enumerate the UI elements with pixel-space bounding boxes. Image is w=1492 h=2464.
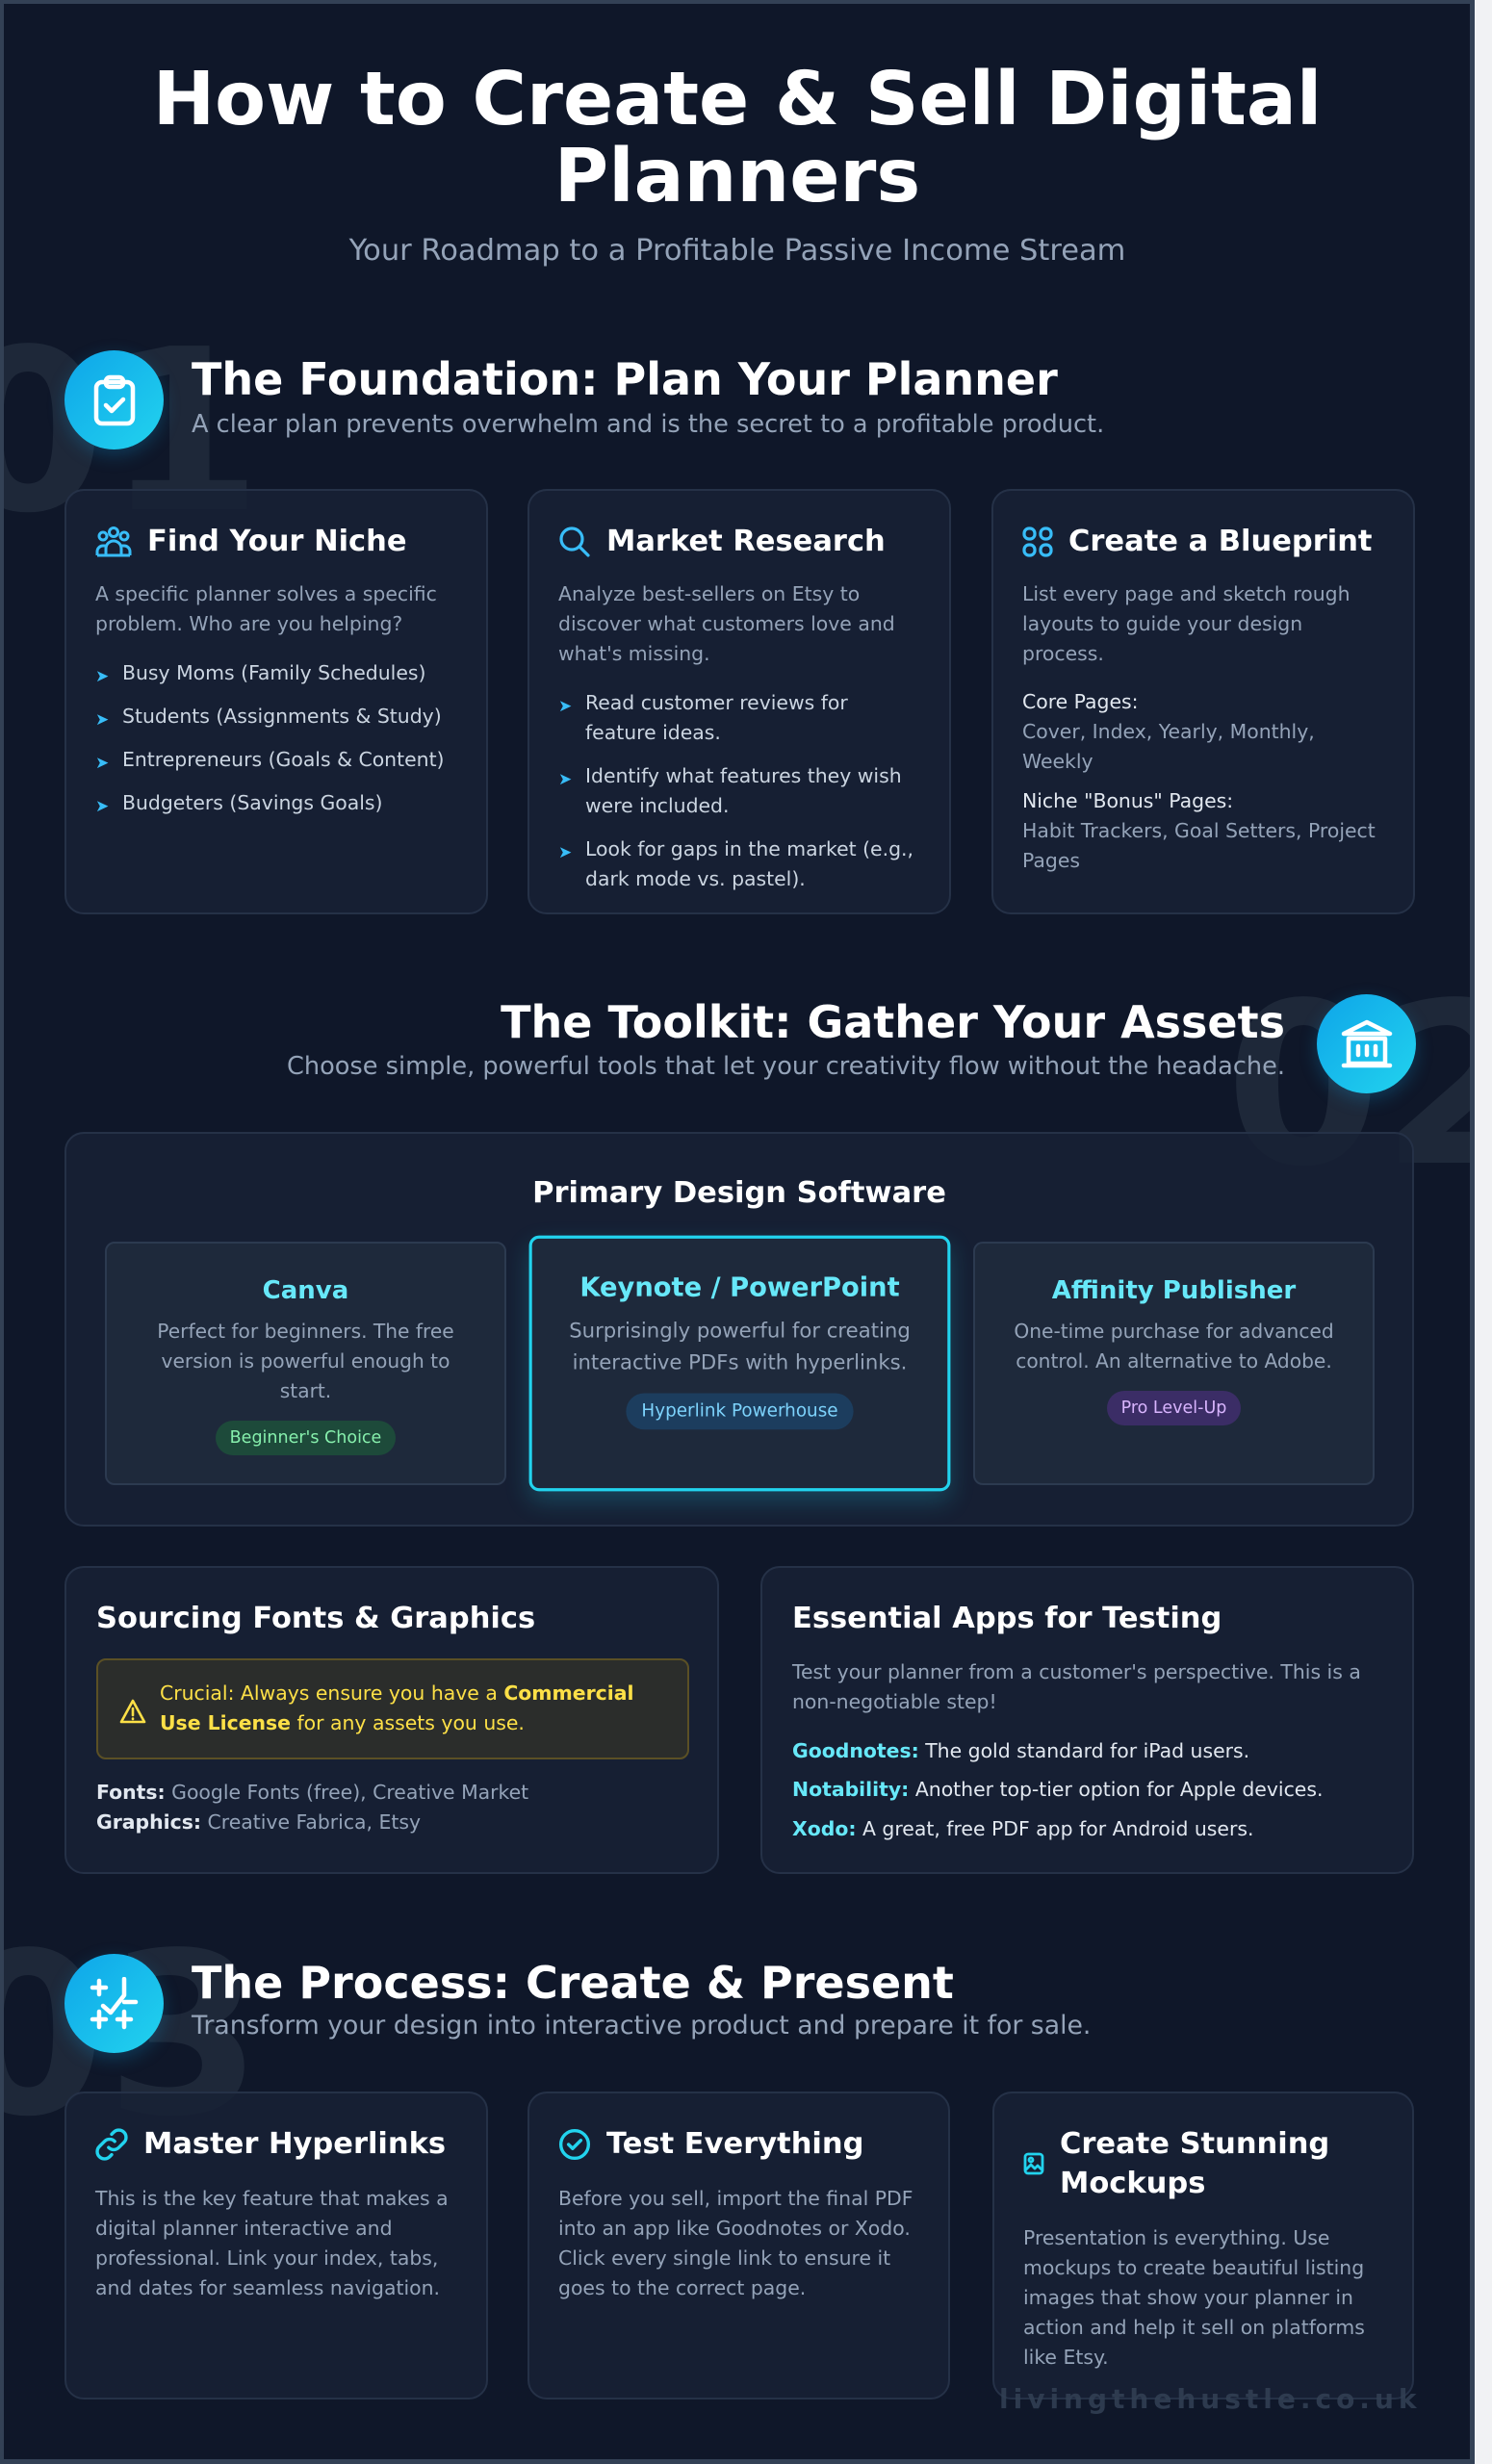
app list: Goodnotes: The gold standard for iPad users. [792,1739,1249,1762]
software: keynote: Surprisingly powerful for creating interactive PDFs with hyperlinks. [569,1319,911,1374]
panel heading: Sourcing Fonts & Graphics [96,1602,535,1635]
badge: hyperlink: Hyperlink Powerhouse [641,1401,838,1422]
card text: Presentation is everything. Use mockups to create beautiful listing images that show your planner in action and help it sell on platforms like Etsy. [1023,2226,1365,2369]
badge: beginner [216,1421,396,1455]
badge: pro: Pro Level-Up [1121,1399,1226,1418]
card: master hyperlinks [64,2092,488,2400]
card title: Test Everything [606,2127,863,2161]
core pages [1022,690,1315,773]
software: canva: Perfect for beginners. The free version is powerful enough to start. [157,1320,454,1402]
sources text [96,1781,528,1834]
subheading: toolkit: Choose simple, powerful tools that let your creativity flow without the headache. [287,1052,1285,1081]
sources text: Graphics: Creative Fabrica, Etsy [96,1810,421,1834]
software: affinity: Affinity Publisher [1052,1276,1296,1305]
heading: process: The Process: Create & Present [192,1957,954,2009]
bullet list: Read customer reviews for feature ideas. [585,691,848,744]
software: affinity: One-time purchase for advanced control. An alternative to Adobe. [1014,1320,1334,1373]
bullet list: Busy Moms (Family Schedules) [122,661,425,684]
panel: primary design software [64,1132,1414,1527]
software: canva: Canva [263,1276,348,1305]
icon: warning [119,1700,146,1723]
core pages: Core Pages: [1022,690,1139,713]
warning callout: Crucial: Always ensure you have a Commercial Use License for any assets you use. [160,1681,633,1734]
card: find your niche [64,489,488,914]
bullet list: Students (Assignments & Study) [122,705,442,728]
software: keynote [529,1236,950,1491]
panel heading: Essential Apps for Testing [792,1602,1222,1635]
heading: toolkit: The Toolkit: Gather Your Assets [501,996,1285,1048]
card text: Analyze best-sellers on Etsy to discover what customers love and what's missing. [558,582,895,665]
heading: foundation: The Foundation: Plan Your Planner [192,353,1058,405]
title [153,57,1322,219]
card title: blueprint: Create a Blueprint [1068,525,1373,558]
card: stunning mockups [992,2092,1414,2400]
bullet list [560,691,913,890]
bonus pages: Niche "Bonus" Pages: [1022,789,1233,812]
bonus pages: Habit Trackers, Goal Setters, Project Pages [1022,819,1376,872]
icon: bank [1317,994,1416,1093]
card: market research [527,489,951,914]
card title: market research: Market Research [606,525,886,558]
subheading: foundation: A clear plan prevents overwhelm and is the secret to a profitable product. [192,410,1104,439]
software: keynote: Keynote / PowerPoint [579,1273,900,1303]
panel text: Test your planner from a customer's perspective. This is a non-negotiable step! [792,1660,1361,1713]
card title: find your niche: Find Your Niche [147,525,407,558]
panel: essential apps [760,1566,1414,1874]
software: affinity [973,1242,1375,1485]
title: How to Create & Sell Digital [153,57,1322,142]
icon: clipboard check [64,350,164,449]
bullet list: Look for gaps in the market (e.g., dark mode vs. pastel). [585,837,913,890]
app list: Xodo: A great, free PDF app for Android users. [792,1817,1253,1840]
card title: Master Hyperlinks [143,2127,446,2161]
badge: pro [1107,1391,1241,1425]
core pages: Cover, Index, Yearly, Monthly, Weekly [1022,720,1315,773]
card title: Create Stunning [1060,2127,1329,2161]
card text: A specific planner solves a specific problem. Who are you helping? [95,582,437,635]
subtitle: Your Roadmap to a Profitable Passive Income Stream [349,234,1125,268]
warning callout [96,1658,689,1759]
card: test everything [527,2092,950,2400]
sources text: Fonts: Google Fonts (free), Creative Market [96,1781,528,1804]
panel heading: Primary Design Software [532,1176,946,1210]
subheading: process: Transform your design into interactive product and prepare it for sale. [192,2011,1091,2040]
app list: Notability: Another top-tier option for Apple devices. [792,1778,1323,1801]
card title [1024,2127,1329,2200]
panel: sourcing fonts [64,1566,719,1874]
card: create a blueprint [991,489,1415,914]
bonus pages [1022,789,1376,872]
title: Planners [554,134,920,219]
bullet list [97,661,445,814]
badge: hyperlink [627,1393,853,1429]
card text: Before you sell, import the final PDF into an app like Goodnotes or Xodo. Click every single link to ensure it goes to the correct page. [558,2187,913,2299]
icon: process [64,1954,164,2053]
footer: site watermark: livingthehustle.co.uk [999,2383,1421,2415]
card text: List every page and sketch rough layouts to guide your design process. [1022,582,1351,665]
app list [792,1739,1323,1840]
badge: beginner: Beginner's Choice [230,1428,381,1448]
bullet list: Entrepreneurs (Goals & Content) [122,748,445,771]
software: canva [105,1242,506,1485]
bullet list: Identify what features they wish were included. [585,764,902,817]
card title: Mockups [1060,2167,1205,2200]
card text: This is the key feature that makes a digital planner interactive and professional. Link your index, tabs, and dates for seamless navigation. [95,2187,449,2299]
bullet list: Budgeters (Savings Goals) [122,791,383,814]
